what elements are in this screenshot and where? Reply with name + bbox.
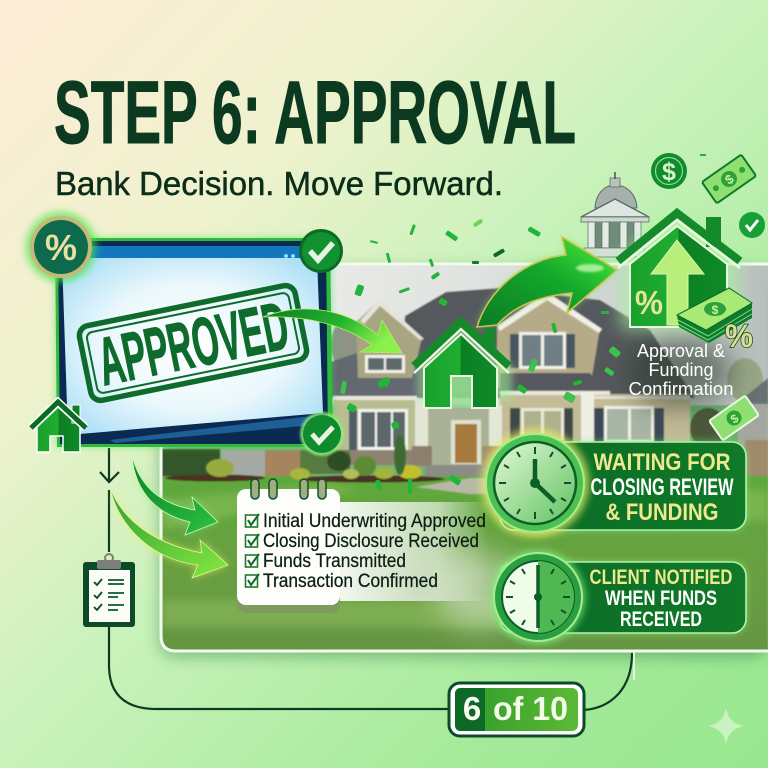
badge: progress bbox=[449, 683, 584, 736]
checklist text: Funds Transmitted bbox=[263, 551, 406, 572]
icon: clock two bbox=[491, 550, 585, 644]
panel: waiting for closing bbox=[500, 442, 746, 530]
caption: approval and funding bbox=[628, 341, 734, 399]
connector light trace bbox=[633, 652, 635, 680]
checklist text: Transaction Confirmed bbox=[263, 571, 438, 592]
confetti bbox=[340, 154, 706, 494]
background trees bbox=[332, 326, 764, 442]
up arrow bbox=[651, 240, 704, 325]
neighbour house bbox=[735, 378, 768, 478]
main roof bbox=[330, 288, 695, 398]
screen bbox=[62, 258, 323, 435]
stamp text: APPROVED bbox=[92, 288, 295, 400]
icon: sparkle bbox=[708, 708, 744, 744]
icon: flying bill bottom: $ bbox=[728, 411, 742, 426]
waiting text bbox=[590, 449, 734, 526]
client notified text bbox=[590, 566, 732, 631]
icon: courthouse dome bbox=[581, 172, 649, 257]
icon: percent on cash: % bbox=[725, 318, 753, 354]
notepad page bbox=[237, 489, 340, 605]
panel: checklist notepad bbox=[237, 479, 490, 613]
icon: funding house bbox=[618, 210, 740, 330]
sky bbox=[330, 266, 768, 406]
panel: client notified bbox=[500, 562, 746, 633]
dark haze behind caption bbox=[628, 336, 732, 408]
checklist text: Closing Disclosure Received bbox=[263, 531, 479, 552]
walkway bbox=[416, 478, 500, 494]
icon: check badge top bbox=[299, 229, 343, 273]
arrow: house to funding bbox=[477, 237, 617, 327]
icon: clock one bbox=[481, 429, 589, 537]
icon: cash stack: $ bbox=[712, 303, 719, 317]
lawn bbox=[162, 476, 768, 652]
checklist text bbox=[263, 511, 486, 592]
ground floor windows bbox=[349, 406, 664, 450]
icon: green house bbox=[414, 322, 512, 408]
client notified text: WHEN FUNDS bbox=[605, 587, 717, 610]
mulch beds bbox=[165, 474, 445, 482]
left yard: hedge, garage, fence bbox=[162, 449, 350, 481]
waiting text: WAITING FOR bbox=[594, 449, 730, 476]
icon: flying bill top bbox=[702, 155, 756, 203]
upper right storey bbox=[497, 292, 602, 388]
connector line: process path bbox=[100, 448, 632, 710]
caption: approval and funding: Approval & bbox=[637, 341, 725, 361]
monitor glow and frame bbox=[55, 238, 333, 447]
porch, door and columns bbox=[345, 392, 594, 478]
icon: small house bbox=[31, 402, 86, 452]
client notified text: CLIENT NOTIFIED bbox=[590, 566, 732, 589]
lawn stripes bbox=[162, 484, 768, 628]
title bar bbox=[62, 246, 320, 259]
notepad backing bbox=[237, 497, 340, 613]
caption: approval and funding: Confirmation bbox=[628, 379, 734, 399]
icon: cash stack bbox=[677, 288, 752, 343]
icon: flying bill bottom bbox=[709, 396, 759, 440]
notepad rings bbox=[251, 479, 326, 499]
badge number: 6 bbox=[463, 690, 481, 727]
icon: percent badge bbox=[26, 212, 96, 282]
icon: dollar coin bbox=[651, 153, 687, 189]
subtitle: Bank Decision. Move Forward. bbox=[55, 165, 503, 202]
base highlight bbox=[110, 415, 325, 443]
icon: flying bill top: $ bbox=[722, 171, 737, 188]
notepad extension strip bbox=[340, 502, 490, 601]
mist behind panels bbox=[435, 552, 525, 628]
panel: house photo bbox=[160, 264, 768, 656]
icon: clipboard bbox=[83, 554, 135, 627]
waiting text: & FUNDING bbox=[606, 499, 718, 526]
caption: approval and funding: Funding bbox=[648, 360, 714, 380]
badge label: of 10 bbox=[493, 690, 568, 727]
arrow: monitor to house bbox=[263, 309, 402, 353]
client notified text: RECEIVED bbox=[620, 608, 702, 631]
panel: monitor with approved stamp bbox=[55, 238, 333, 447]
checklist text: Initial Underwriting Approved bbox=[263, 511, 486, 532]
ground floor wall bbox=[333, 391, 690, 450]
arrow: dark green to notepad bbox=[132, 455, 218, 535]
icon: percent badge: % bbox=[45, 227, 77, 268]
shrubs bbox=[206, 435, 422, 480]
percent on house: % bbox=[635, 284, 663, 321]
icon: dollar coin: $ bbox=[662, 158, 676, 186]
icon: small check bbox=[739, 212, 765, 238]
porch roof bbox=[500, 372, 593, 389]
icon: check badge bottom bbox=[300, 412, 344, 456]
left gable bbox=[356, 299, 424, 378]
arrow: light green to notepad bbox=[110, 488, 228, 578]
stamp bbox=[78, 284, 309, 403]
checkboxes bbox=[246, 514, 259, 587]
